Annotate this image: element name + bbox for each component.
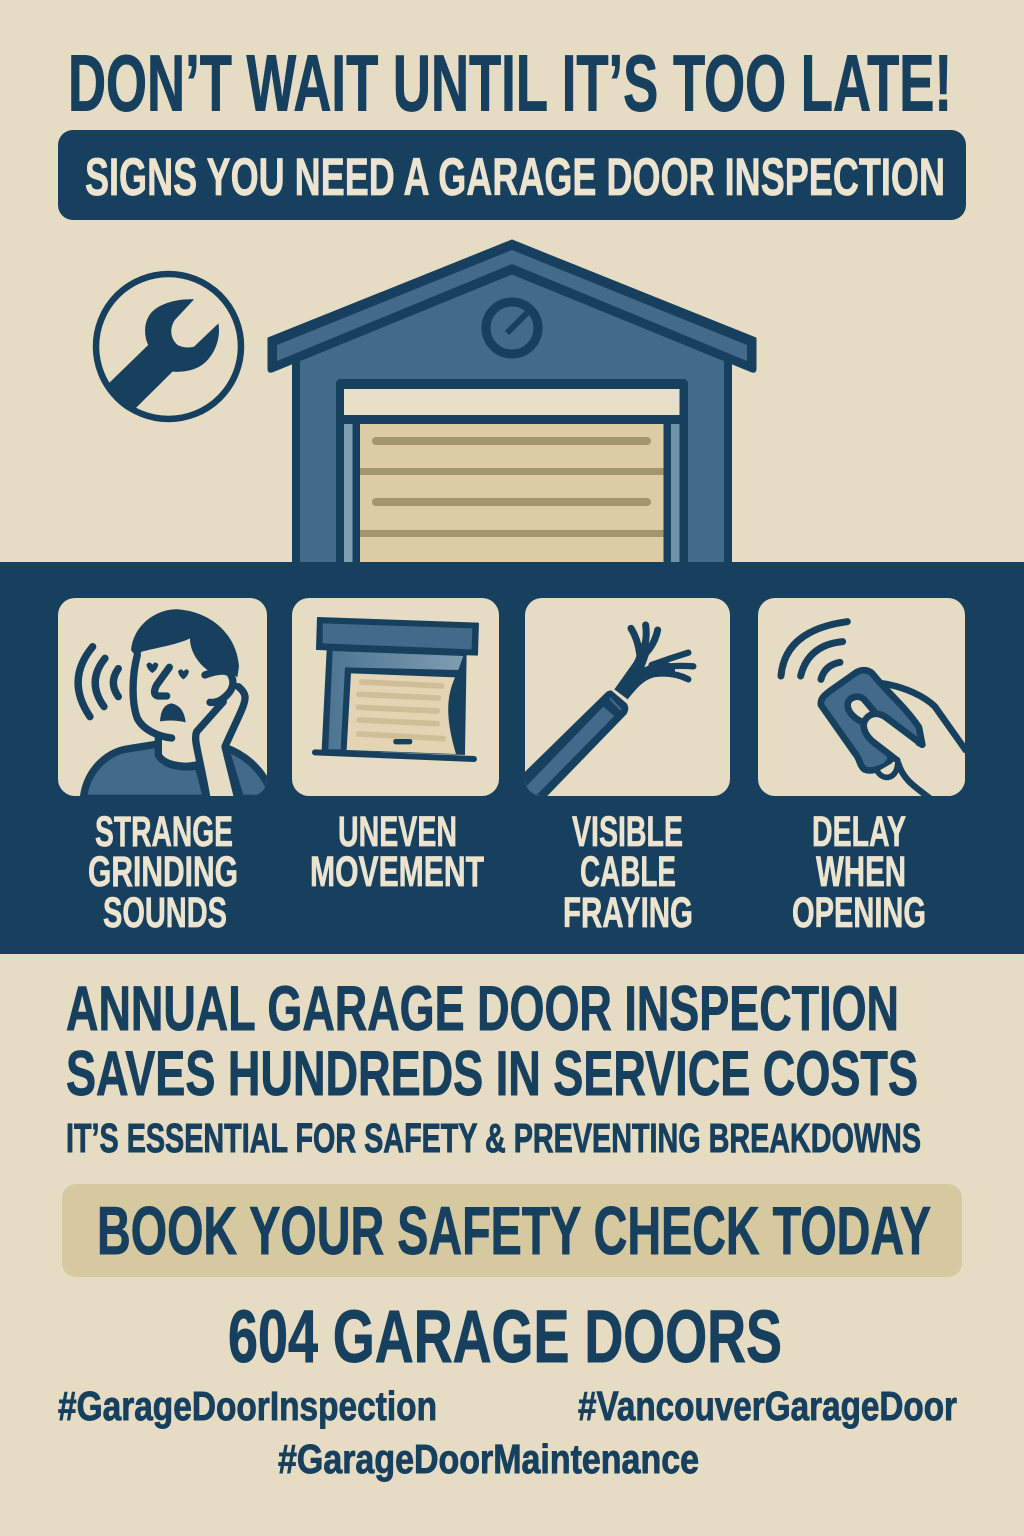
hashtags: #GarageDoorInspection — [58, 1383, 437, 1429]
label: visible cable fraying: VISIBLE — [572, 808, 683, 856]
label: strange grinding sounds — [88, 808, 238, 937]
label: strange grinding sounds: STRANGE — [95, 808, 233, 856]
heading: annual inspection savings — [66, 974, 918, 1109]
label: delay when opening: OPENING — [792, 889, 926, 937]
door frame — [336, 379, 688, 562]
label: delay when opening: WHEN — [816, 848, 906, 896]
label: strange grinding sounds: SOUNDS — [103, 889, 227, 937]
door panel — [360, 424, 664, 562]
icon: wrench in circle — [96, 274, 241, 419]
hashtags: #GarageDoorMaintenance — [278, 1436, 699, 1482]
panel: warning signs band — [0, 562, 1024, 954]
card: cable fraying — [520, 598, 730, 798]
garage building — [268, 240, 756, 562]
card: grinding sounds — [58, 598, 268, 798]
roof — [268, 240, 756, 372]
label: delay when opening: DELAY — [812, 808, 906, 856]
label: visible cable fraying: FRAYING — [563, 889, 693, 937]
card: delayed remote — [758, 598, 972, 803]
card: uneven movement — [292, 598, 499, 796]
label: delay when opening — [792, 808, 926, 937]
gable vent — [486, 302, 538, 354]
subtitle banner — [58, 130, 966, 220]
label: uneven movement: MOVEMENT — [310, 848, 484, 896]
company name: 604 GARAGE DOORS — [228, 1295, 782, 1378]
wall — [292, 255, 732, 562]
label: visible cable fraying: CABLE — [580, 848, 676, 896]
label: uneven movement: UNEVEN — [338, 808, 457, 856]
label: uneven movement — [310, 808, 484, 896]
label: visible cable fraying — [563, 808, 693, 937]
label: strange grinding sounds: GRINDING — [88, 848, 238, 896]
hashtags — [58, 1383, 957, 1482]
